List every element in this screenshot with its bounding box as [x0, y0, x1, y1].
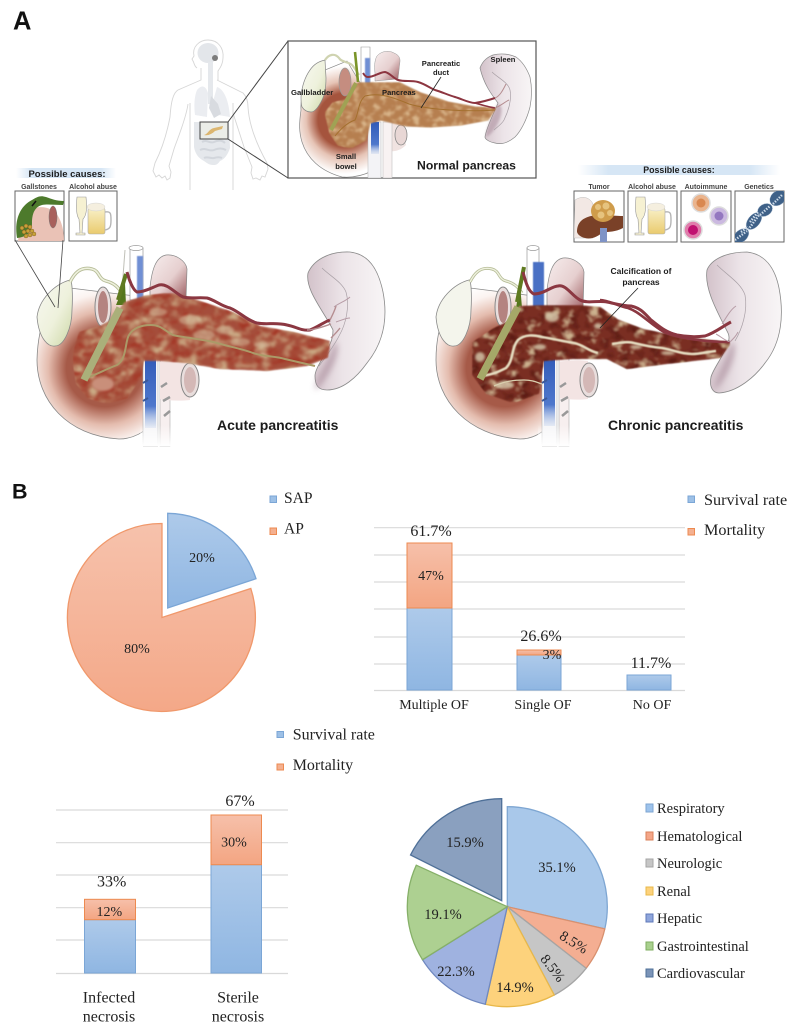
pie chart: organ failure types: 8.5%: [537, 952, 568, 985]
inset labels: duct: [433, 68, 449, 77]
icon: alcohol abuse, acute: [69, 184, 117, 241]
pie chart: SAP vs AP: [67, 513, 256, 711]
bar chart: necrosis: Infected: [83, 990, 135, 1007]
pie chart: organ failure types: 22.3%: [437, 964, 475, 980]
acute pancreas body: [73, 293, 330, 403]
legend: organ failure types: Cardiovascular: [657, 966, 745, 982]
bar chart: necrosis: 12%: [96, 905, 122, 920]
inset labels: Pancreas: [382, 88, 416, 97]
pie chart: organ failure types: 14.9%: [496, 980, 534, 996]
icon: alcohol abuse, acute: Alcohol abuse: [69, 184, 117, 191]
bar chart: necrosis: Sterile: [217, 990, 259, 1007]
callout: calcification of pancreas: Calcification of: [611, 266, 672, 276]
icon: autoimmune cells: [681, 184, 731, 242]
bar chart: organ failure: No OF: [633, 698, 671, 713]
icon: tumor: Tumor: [588, 184, 610, 191]
normal pancreas body: [325, 82, 496, 148]
legend: organ failure types: Neurologic: [657, 856, 722, 872]
icon: alcohol abuse, chronic: [628, 184, 677, 242]
callout: calcification of pancreas: [600, 266, 672, 328]
legend: organ failure types: Respiratory: [657, 801, 725, 817]
pie chart: organ failure types: 8.5%: [556, 928, 591, 958]
pie chart: organ failure types: 35.1%: [538, 860, 576, 876]
possible causes band, acute: Possible causes:: [28, 169, 106, 180]
legend: survival and mortality, bottom: [277, 726, 375, 774]
inset labels: Normal pancreas: [417, 158, 516, 172]
pie chart: organ failure types: [407, 799, 607, 1007]
possible causes band, chronic: [578, 165, 780, 175]
legend: organ failure types: Hepatic: [657, 911, 702, 927]
legend: organ failure types: Hematological: [657, 829, 742, 845]
inset labels: Gallbladder: [291, 88, 333, 97]
legend: survival and mortality, bottom: Survival rate: [293, 726, 375, 743]
pie chart: organ failure types: 19.1%: [424, 907, 462, 923]
inset labels: Pancreatic: [422, 59, 460, 68]
bar chart: organ failure: 47%: [418, 569, 444, 584]
bar chart: necrosis: 67%: [225, 793, 255, 810]
bar chart: necrosis: necrosis: [212, 1009, 264, 1026]
icon: human body with organs: [153, 40, 268, 190]
title: chronic pancreatitis: Chronic pancreatitis: [608, 417, 744, 433]
legend: SAP / AP: [270, 490, 312, 538]
icon: tumor: [574, 184, 624, 242]
bar chart: organ failure: Multiple OF: [399, 698, 469, 713]
possible causes band, chronic: Possible causes:: [643, 165, 715, 175]
panel: normal pancreas inset: [288, 41, 536, 178]
panel label A: A: [13, 8, 31, 36]
legend: organ failure types: Gastrointestinal: [657, 939, 749, 955]
bar chart: organ failure: 61.7%: [410, 523, 452, 540]
bar chart: necrosis: 30%: [221, 836, 247, 851]
slice: AP 80%: [67, 523, 255, 711]
inset labels: [291, 55, 516, 172]
legend: survival and mortality, top: [688, 491, 787, 539]
zoom lines from body to normal pancreas inset: [228, 41, 288, 178]
legend: survival and mortality, top: Survival rate: [704, 491, 787, 509]
inset labels: bowel: [335, 162, 357, 171]
inset labels: Small: [336, 152, 356, 161]
legend: SAP / AP: AP: [284, 520, 304, 538]
panel label B: B: [12, 480, 28, 504]
bar chart: necrosis: [56, 793, 288, 1026]
bar chart: organ failure: [374, 523, 685, 713]
legend: survival and mortality, top: Mortality: [704, 521, 766, 539]
legend: SAP / AP: SAP: [284, 490, 312, 507]
pie chart: SAP vs AP: 20%: [189, 551, 215, 566]
title: acute pancreatitis: Acute pancreatitis: [217, 417, 339, 433]
bar chart: organ failure: 3%: [543, 648, 562, 663]
inset labels: Spleen: [491, 55, 516, 64]
legend: survival and mortality, bottom: Mortality: [293, 757, 353, 774]
slice: SAP 20%: [168, 513, 256, 608]
callout: calcification of pancreas: pancreas: [622, 277, 660, 287]
pie chart: SAP vs AP: 80%: [124, 642, 150, 657]
illustration: acute pancreatitis: [37, 246, 385, 446]
legend: organ failure types: Renal: [657, 884, 691, 900]
icon: alcohol abuse, chronic: Alcohol abuse: [628, 184, 676, 191]
pie chart: organ failure types: 15.9%: [446, 835, 484, 851]
icon: genetics DNA: [734, 184, 784, 242]
icon: autoimmune cells: Autoimmune: [685, 184, 727, 191]
legend: organ failure types: [646, 801, 749, 982]
bar chart: organ failure: 11.7%: [631, 655, 671, 672]
illustration: chronic pancreatitis: [436, 246, 781, 446]
leader lines from gallstones to gallbladder: [15, 240, 63, 308]
bar chart: organ failure: Single OF: [514, 698, 572, 713]
icon: gallstones: Gallstones: [21, 184, 57, 191]
bar chart: necrosis: necrosis: [83, 1009, 135, 1026]
icon: gallstones: [15, 184, 64, 241]
bar chart: organ failure: 26.6%: [520, 628, 562, 645]
icon: genetics DNA: Genetics: [744, 184, 774, 191]
bar chart: necrosis: 33%: [97, 874, 126, 891]
chronic pancreas body: [472, 305, 730, 402]
